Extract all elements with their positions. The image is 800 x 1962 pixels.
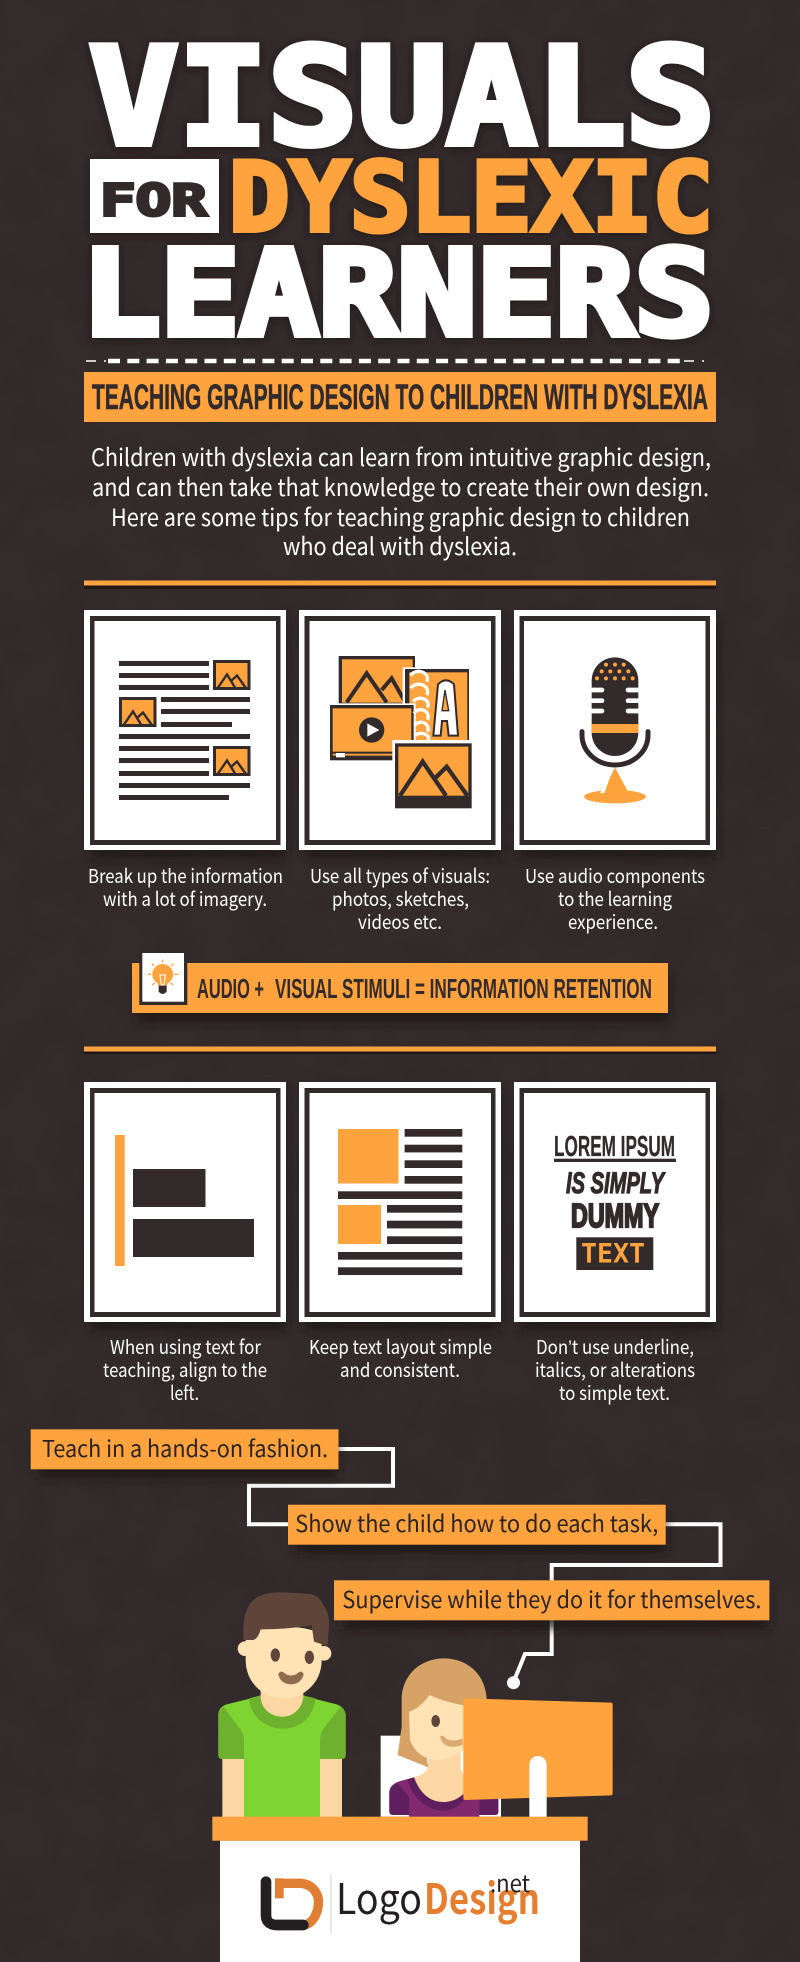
caption: visuals: photos, sketches, [332,885,469,912]
panel: align text left [84,1082,286,1330]
caption: alterations: italics, or alterations [535,1356,695,1383]
icon: photos, sketchbook and video [328,656,473,810]
title badge: FOR [90,159,219,233]
caption: align left: teaching, align to the [103,1356,267,1383]
step 3: supervise: Supervise while they do it for themselves. [342,1581,761,1615]
caption: audio: Use audio components [525,862,705,889]
caption: layout: and consistent. [340,1356,460,1383]
caption: imagery: with a lot of imagery. [103,885,267,912]
caption: alterations: Don’t use underline, [536,1333,694,1360]
icon: text samples [554,1131,676,1270]
caption: audio: to the learning [558,885,672,912]
caption: audio: experience. [568,908,658,935]
arrow: connector path between steps [249,1449,720,1682]
teacher [218,1592,346,1818]
computer monitor [463,1698,613,1818]
step 2: show the child [288,1505,666,1553]
icon: text samples: DUMMY [571,1197,659,1234]
icon: text samples: IS SIMPLY [566,1167,666,1200]
step 1: hands-on [31,1429,338,1478]
caption: visuals: Use all types of visuals: [310,862,490,889]
subtitle banner [84,372,716,422]
title badge: FOR: FOR [100,176,208,226]
caption: layout [309,1333,492,1383]
title line: LEARNERS: LEARNERS [82,224,714,362]
logo wordmark: Logo [336,1866,422,1927]
caption: align left: left. [170,1379,199,1406]
icon: text samples: LOREM IPSUM [554,1131,675,1163]
callout: audio + visual stimuli [132,953,668,1022]
panel: break up information with imagery [84,610,286,858]
intro text [91,438,711,562]
icon: text samples: TEXT [581,1239,645,1270]
caption: layout: Keep text layout simple [309,1333,492,1360]
intro text: and can then take that knowledge to create their own design. [92,468,709,503]
title [82,20,715,362]
icon: microphone [582,657,648,803]
callout: audio + visual stimuli: AUDIO + [197,973,264,1004]
logo wordmark [336,1864,540,1927]
caption: imagery [88,862,283,912]
intro text: Here are some tips for teaching graphic design to children [111,498,690,533]
caption: visuals: videos etc. [358,908,442,935]
intro text: who deal with dyslexia. [283,527,517,562]
icon: document with images [119,661,250,800]
caption: alterations [535,1333,695,1406]
caption: audio [525,862,705,935]
panel: simple consistent layout [299,1082,501,1330]
logo wordmark: .net [490,1864,530,1899]
icon: simple layout [338,1129,462,1275]
step 3: supervise [334,1580,769,1629]
icon: left aligned blocks [115,1135,254,1266]
caption: alterations: to simple text. [559,1379,670,1406]
intro text: Children with dyslexia can learn from intuitive graphic design, [91,438,711,473]
step 1: hands-on: Teach in a hands-on fashion. [42,1430,328,1464]
panel: no alterations to text [514,1082,716,1330]
panel: all types of visuals [299,610,501,858]
title line: DYSLEXIC: DYSLEXIC [229,144,713,254]
icon: light bulb card [139,953,187,1005]
desk [212,1817,588,1962]
child [381,1658,501,1818]
icon: pointer dot [507,1676,520,1689]
title line: VISUALS: VISUALS [89,20,715,176]
panel: audio components [514,610,716,858]
logo wordmark: Design [424,1866,540,1927]
icon: logo mark [266,1874,332,1933]
caption: align left: When using text for [110,1333,262,1360]
caption: visuals [310,862,490,935]
caption: imagery: Break up the information [88,862,283,889]
caption: align left [103,1333,267,1406]
illustration: teacher and child at desk [212,1592,613,1962]
step 2: show the child: Show the child how to do each task, [295,1505,658,1539]
